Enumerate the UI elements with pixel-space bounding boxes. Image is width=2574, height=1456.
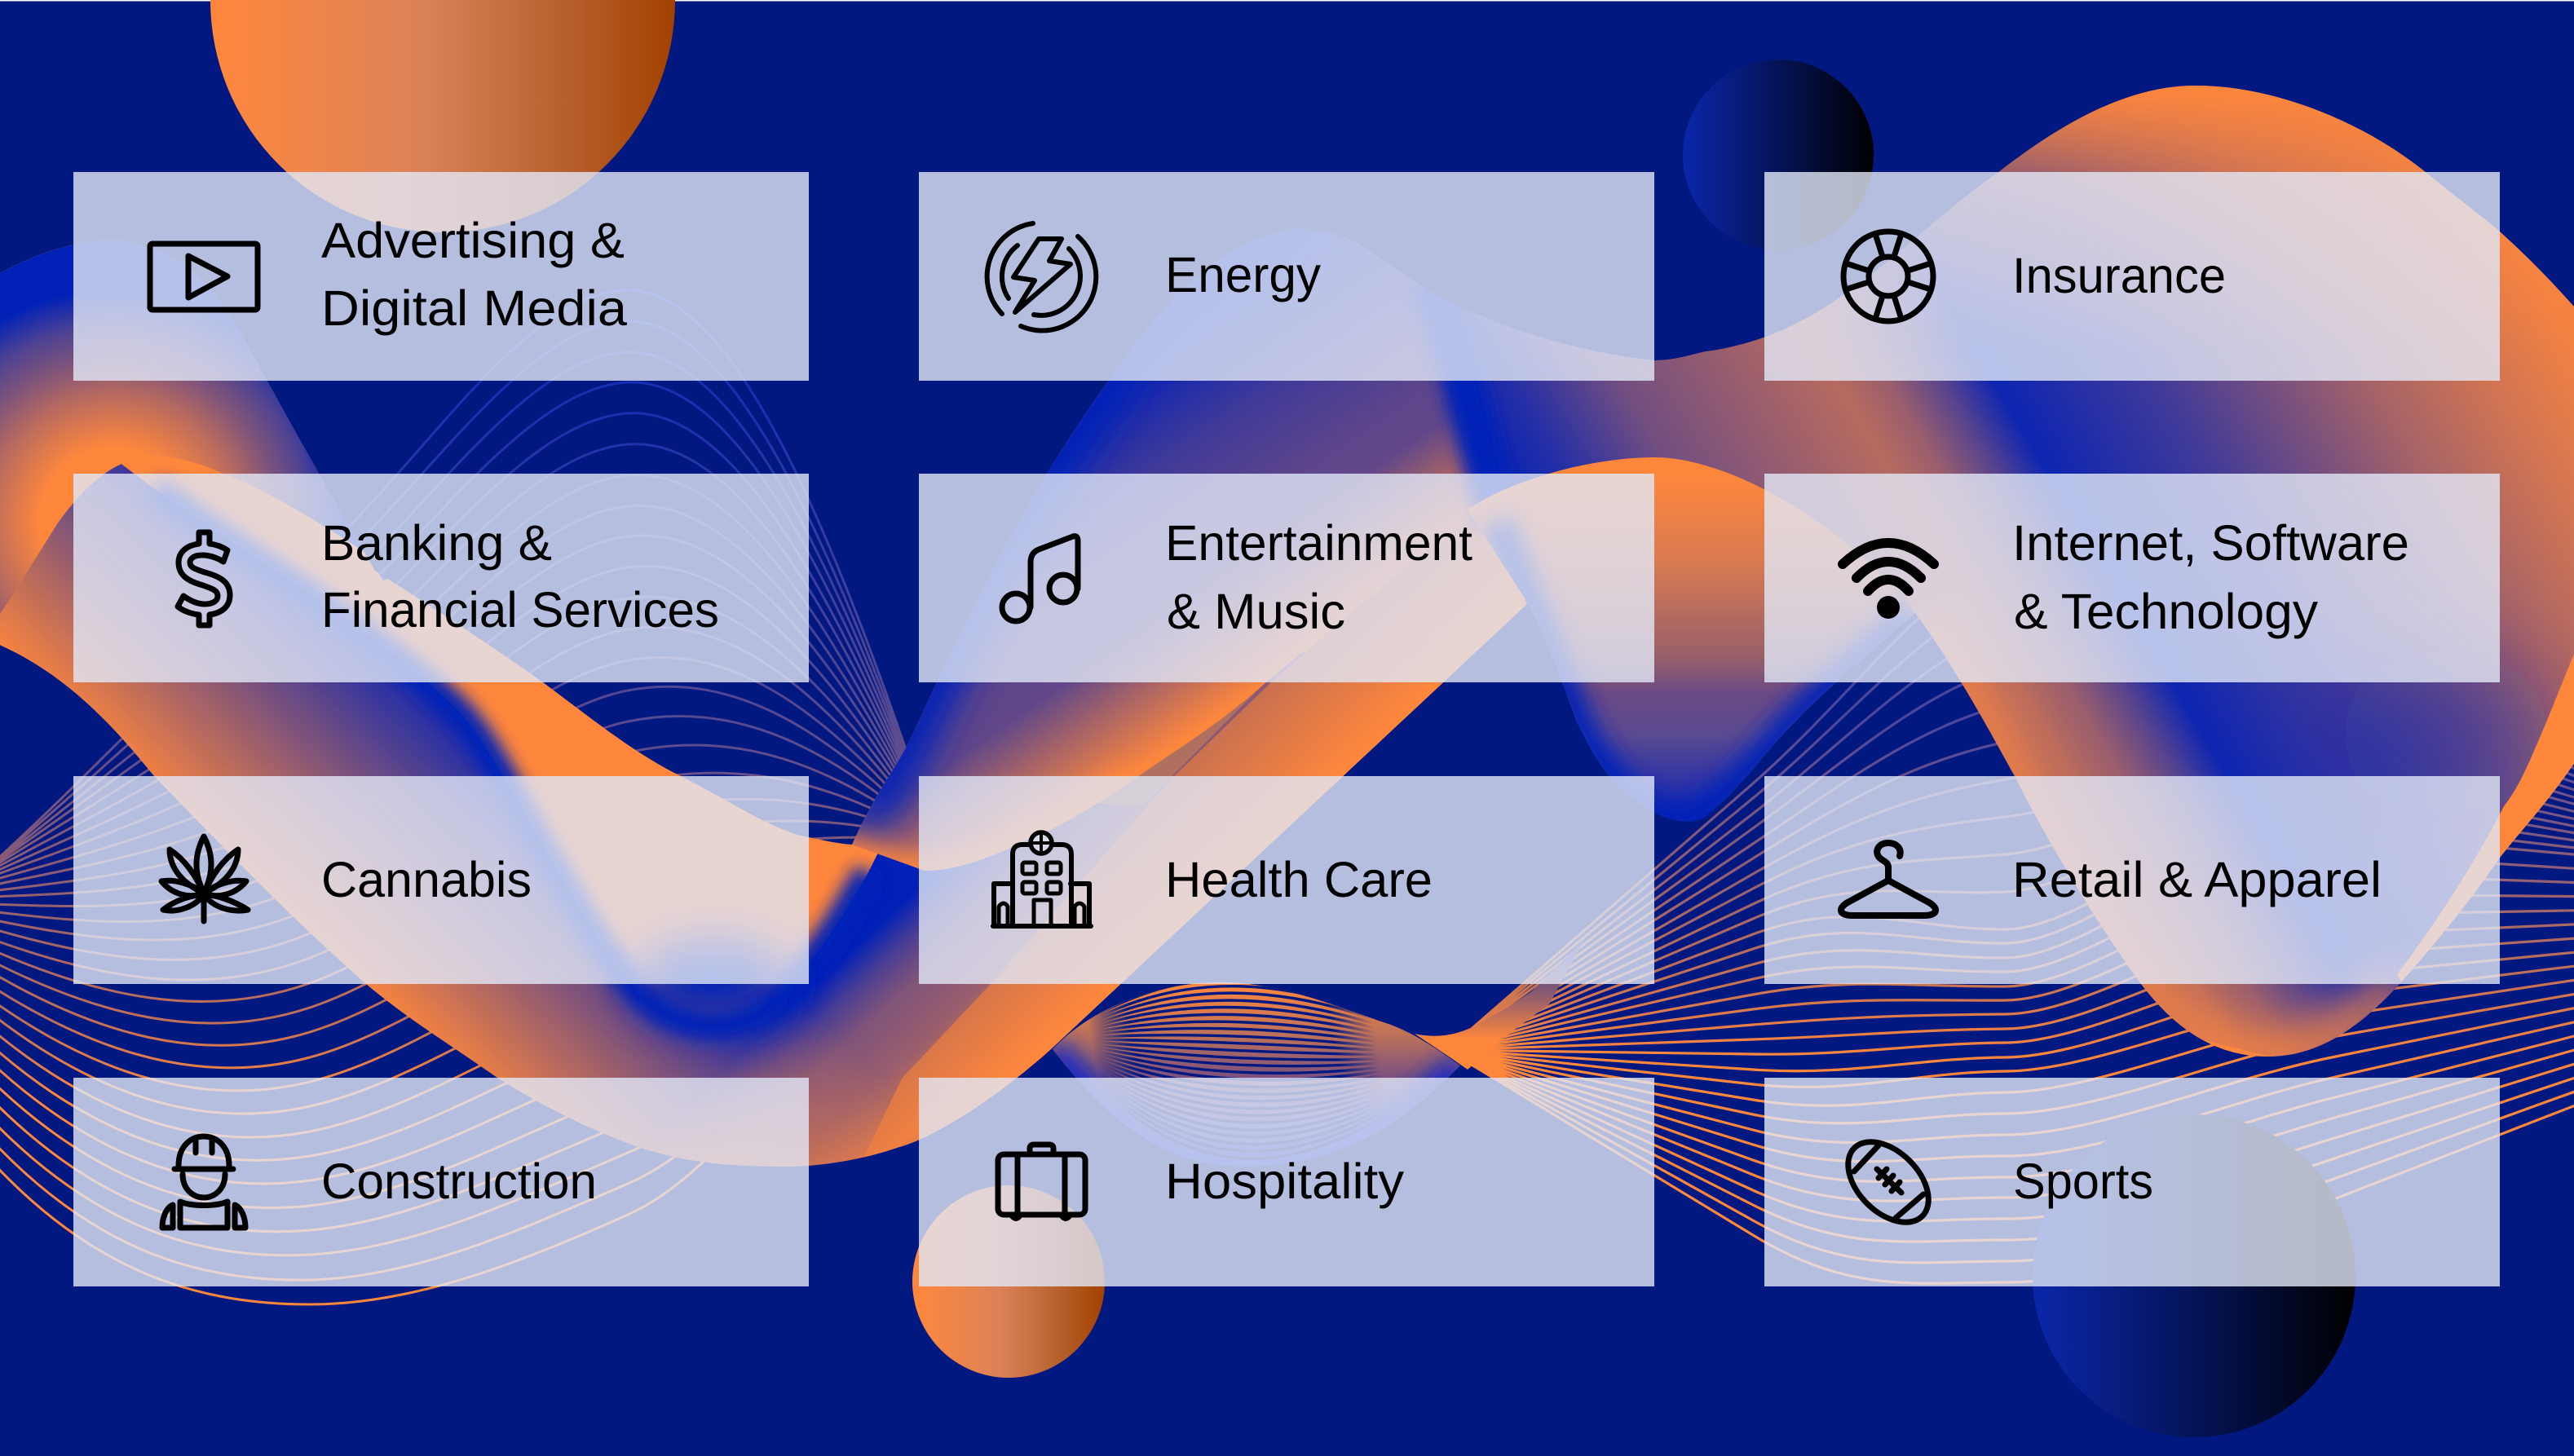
- label: Insurance: Insurance: [2012, 248, 2226, 303]
- label: Entertainment & Music: Entertainment: [1165, 515, 1472, 571]
- label: Health Care: Health Care: [1165, 852, 1433, 907]
- icon: video play: [150, 244, 258, 310]
- circle: dark bottom: [2033, 1114, 2355, 1437]
- label: Energy: Energy: [1165, 247, 1321, 302]
- label: Internet, Software & Technology: & Technology: [2014, 584, 2319, 639]
- icon: suitcase: [998, 1145, 1085, 1218]
- line fan: left wave: [0, 290, 938, 1304]
- panel: Hospitality: [919, 1078, 1654, 1286]
- label: Internet, Software & Technology: [2012, 515, 2409, 639]
- panel: Health Care: [919, 776, 1654, 984]
- panel: Cannabis: [73, 776, 809, 984]
- label: Advertising & Digital Media: Advertising &: [321, 213, 625, 268]
- label: Banking & Financial Services: Banking &: [321, 515, 552, 571]
- ribbon wedge at fan pinch: [1415, 938, 1586, 1070]
- panel: Advertising & Digital Media: [73, 172, 809, 381]
- label: Banking & Financial Services: [321, 515, 719, 638]
- label: Advertising & Digital Media: Digital Media: [321, 280, 627, 336]
- line fan: right wave: [1447, 544, 2574, 1283]
- label: Sports: Sports: [2013, 1154, 2153, 1209]
- label: Construction: Construction: [321, 1154, 597, 1209]
- label: Banking & Financial Services: Financial Services: [321, 582, 719, 638]
- icon: wifi: [1843, 543, 1934, 619]
- icon: cannabis leaf: [161, 836, 248, 921]
- panel: Banking & Financial Services: [73, 474, 809, 682]
- circle: orange top: [210, 0, 675, 232]
- panel: Sports: [1764, 1078, 2500, 1286]
- label: Cannabis: Cannabis: [321, 852, 532, 907]
- label: Hospitality: Hospitality: [1165, 1154, 1405, 1209]
- label: Internet, Software & Technology: Internet, Software: [2012, 515, 2409, 571]
- circle: dark top: [1683, 60, 1874, 250]
- panel: Insurance: [1764, 172, 2500, 381]
- icon: dollar sign: [178, 532, 230, 625]
- icon: construction worker: [162, 1136, 245, 1228]
- label: Advertising & Digital Media: [321, 213, 627, 336]
- circle: orange bottom: [912, 1185, 1105, 1378]
- panel: Construction: [73, 1078, 809, 1286]
- icon: hospital: [993, 832, 1091, 926]
- panel: Entertainment & Music: [919, 474, 1654, 682]
- top edge line: [0, 0, 2574, 2]
- icon: energy bolt: [987, 223, 1096, 330]
- icon: music notes: [1002, 536, 1078, 621]
- label: Entertainment & Music: [1165, 515, 1472, 639]
- icon: life buoy: [1843, 232, 1933, 321]
- icon: clothes hanger: [1841, 843, 1936, 916]
- icon: football: [1833, 1127, 1944, 1238]
- lens ribbon: [1053, 982, 1460, 1167]
- panel: Retail & Apparel: [1764, 776, 2500, 984]
- panel: Internet, Software & Technology: [1764, 474, 2500, 682]
- label: Entertainment & Music: & Music: [1167, 584, 1345, 639]
- label: Retail & Apparel: Retail & Apparel: [2012, 852, 2382, 907]
- main gradient wave: [0, 86, 2574, 1167]
- panel: Energy: [919, 172, 1654, 381]
